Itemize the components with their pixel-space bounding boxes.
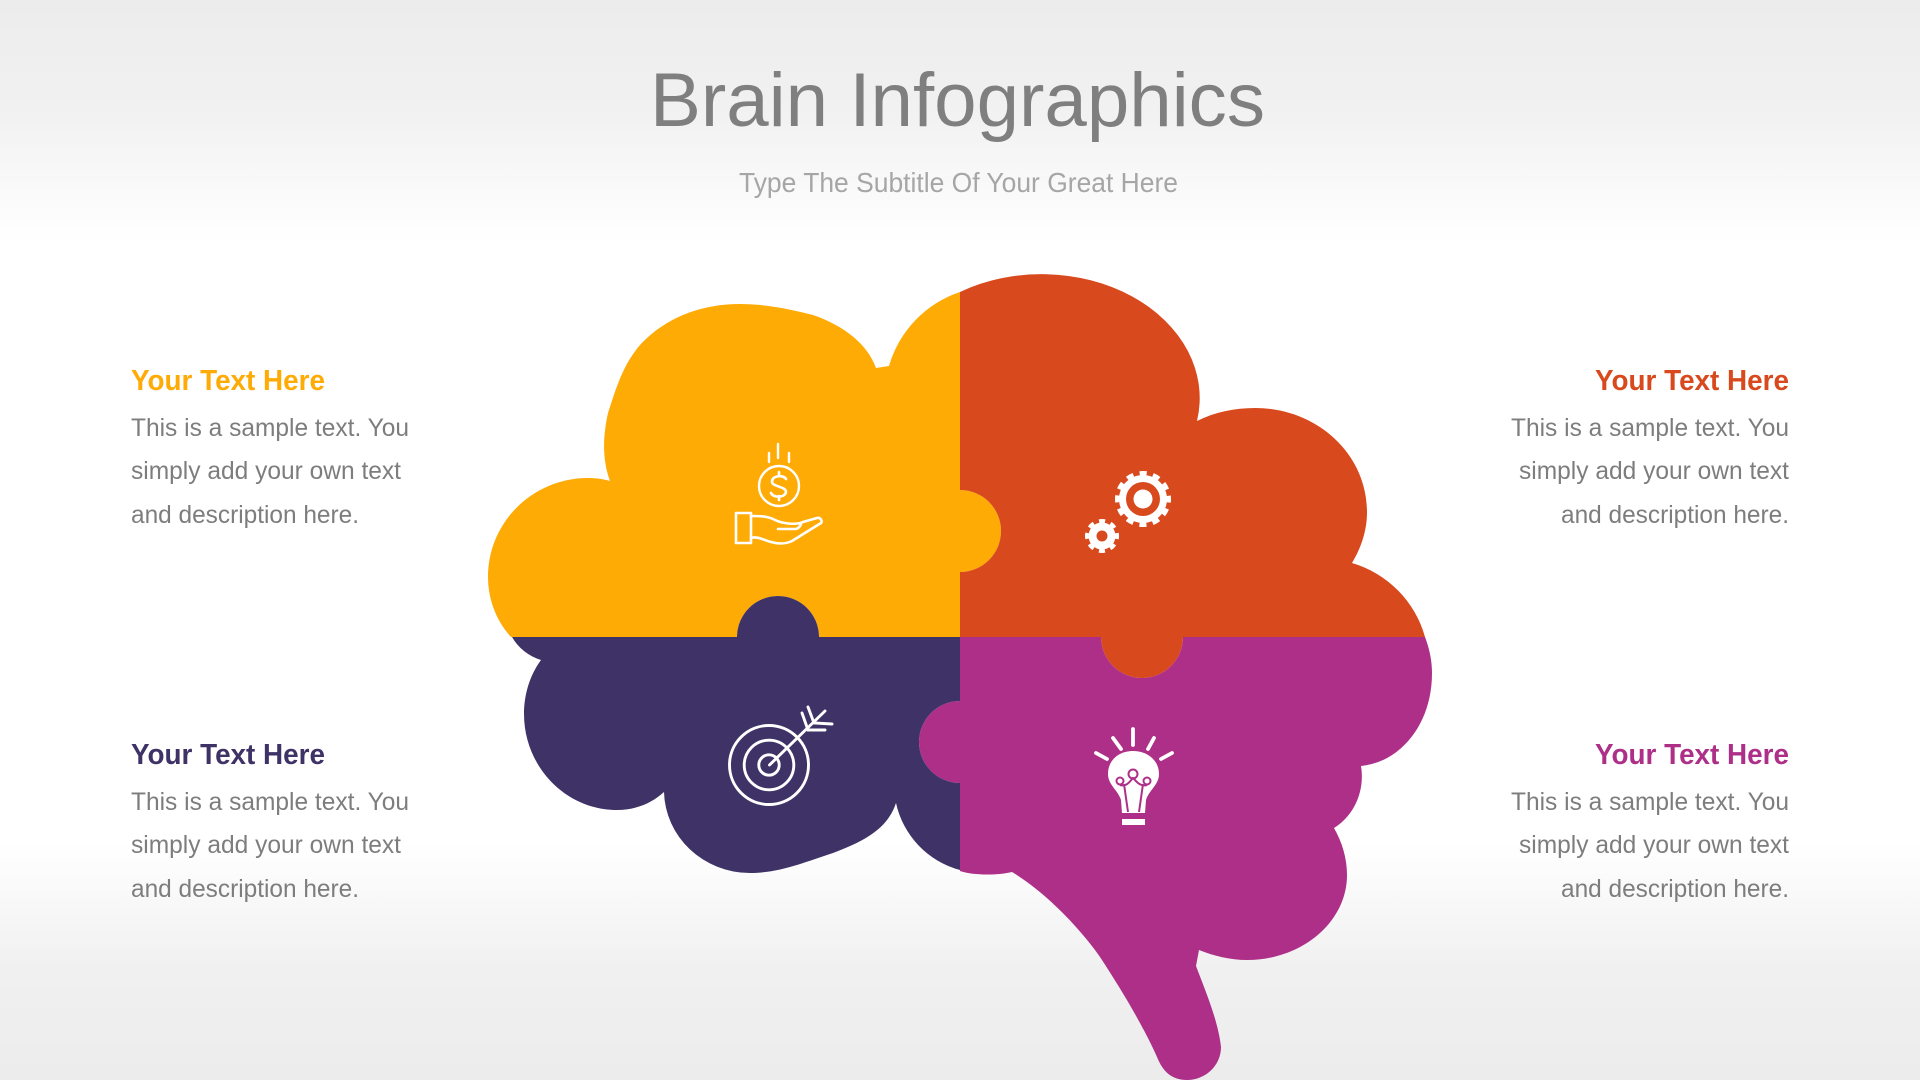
text block: bottom left: Your Text Here (131, 739, 325, 771)
text block: bottom right: and description here. (1561, 875, 1789, 903)
text block: bottom right: Your Text Here (1595, 739, 1789, 771)
brain piece: orange (960, 274, 1425, 678)
icon: light bulb (1096, 729, 1172, 825)
text block: top right (1511, 365, 1789, 529)
brain piece: navy (512, 596, 960, 873)
text block: bottom left: This is a sample text. You (131, 788, 409, 816)
title: Brain Infographics (650, 58, 1265, 143)
icon: gears (1087, 474, 1168, 551)
brain puzzle (488, 274, 1432, 1080)
text block: bottom right: simply add your own text (1519, 831, 1789, 859)
text block: top right: Your Text Here (1595, 365, 1789, 397)
text block: top left: simply add your own text (131, 457, 401, 485)
text block: bottom right (1511, 739, 1789, 903)
text block: top right: This is a sample text. You (1511, 414, 1789, 442)
text block: bottom left: simply add your own text (131, 831, 401, 859)
brain piece: yellow (488, 292, 1001, 637)
text block: bottom right: This is a sample text. You (1511, 788, 1789, 816)
icon: target with arrow (730, 707, 832, 804)
subtitle: Type The Subtitle Of Your Great Here (739, 167, 1178, 198)
text block: top left: Your Text Here (131, 365, 325, 397)
icon: coin in hand (736, 444, 822, 543)
text block: bottom left: and description here. (131, 875, 359, 903)
text block: top left: and description here. (131, 501, 359, 529)
text block: top left (131, 365, 409, 529)
text block: bottom left (131, 739, 409, 903)
brain piece: purple (919, 637, 1432, 1080)
text block: top right: and description here. (1561, 501, 1789, 529)
text block: top right: simply add your own text (1519, 457, 1789, 485)
text block: top left: This is a sample text. You (131, 414, 409, 442)
